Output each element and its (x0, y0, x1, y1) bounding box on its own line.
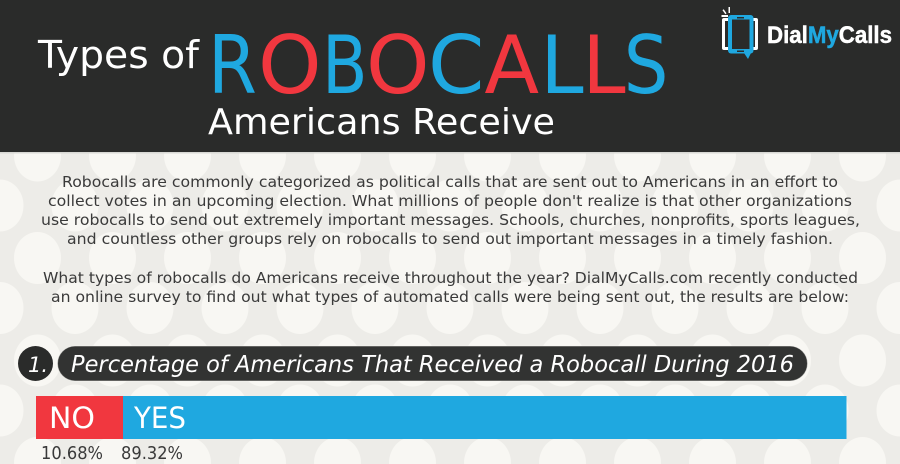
title: B (322, 20, 368, 113)
intro text: use robocalls to send out extremely important messages. Schools, churches, nonprofits, sports leagues, (41, 211, 860, 229)
number badge (18, 346, 53, 381)
logo (722, 7, 892, 59)
intro text (41, 173, 860, 306)
bar chart (36, 396, 846, 464)
title: O (366, 18, 430, 112)
title: A (484, 19, 539, 112)
intro text: collect votes in an upcoming election. What millions of people don't realize is that other organizations (48, 192, 852, 210)
title: Americans Receive (208, 102, 555, 143)
wordmark: DialMyCalls (767, 22, 892, 49)
intro text: and countless other groups rely on robocalls to send out important messages in a timely fashion. (67, 230, 833, 248)
header band (0, 0, 900, 154)
title: O (258, 18, 322, 112)
title: R (208, 19, 257, 112)
section heading (18, 346, 808, 381)
number badge: 1. (28, 353, 48, 377)
bar chart: 89.32% (121, 444, 183, 464)
intro text: an online survey to find out what types of automated calls were being sent out, the results are below: (51, 288, 849, 306)
icon: phone (722, 7, 758, 59)
intro text: What types of robocalls do Americans receive throughout the year? DialMyCalls.com recently conducted (43, 269, 858, 287)
title (37, 18, 668, 143)
title: Types of (37, 33, 201, 77)
title: C (428, 18, 484, 112)
title: L (540, 19, 584, 112)
intro text: Robocalls are commonly categorized as political calls that are sent out to Americans in an effort to (62, 173, 838, 191)
bar chart: NO (49, 401, 95, 435)
bar chart: YES (133, 401, 186, 435)
title: L (582, 19, 626, 112)
title: S (624, 19, 668, 112)
heading pill: Percentage of Americans That Received a Robocall During 2016 (71, 352, 794, 378)
bar chart: 10.68% (41, 444, 103, 464)
